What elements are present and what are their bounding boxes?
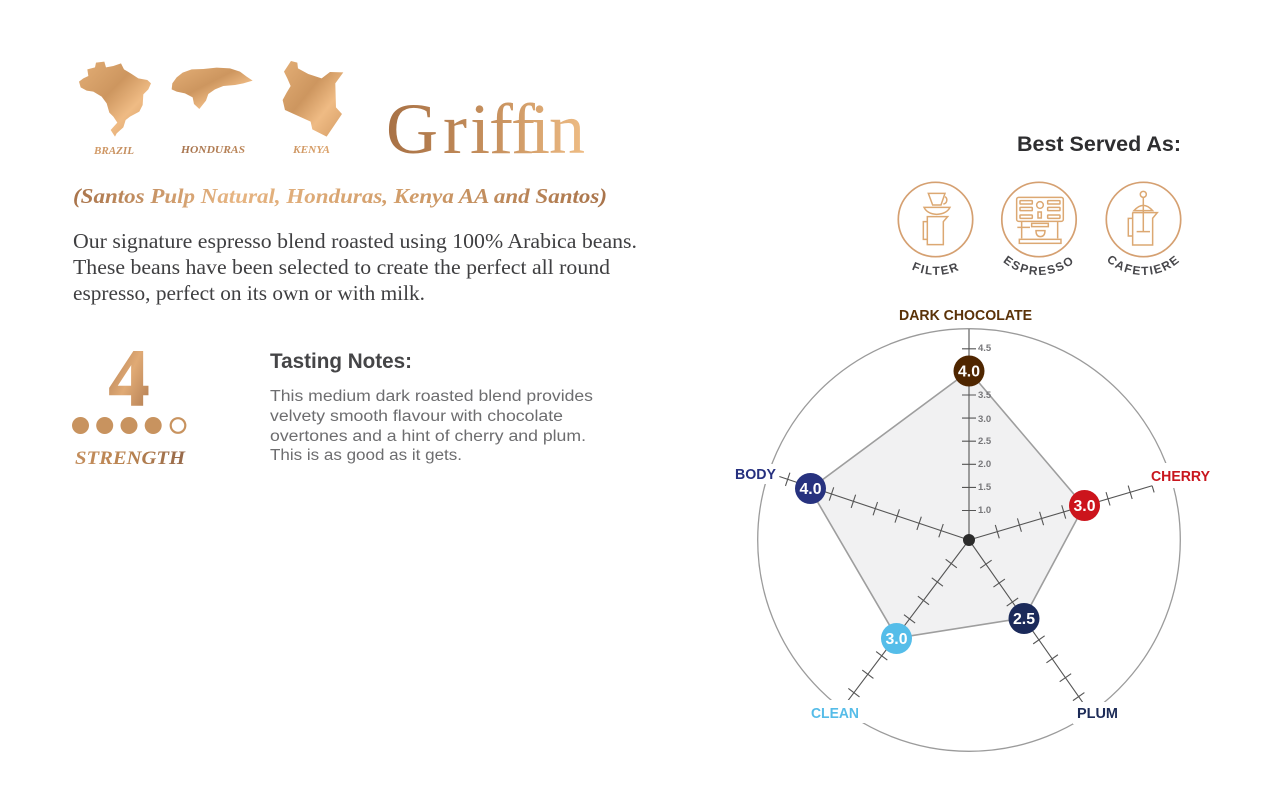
icon: filter bbox=[897, 182, 974, 275]
radar scale labels: 2.0 bbox=[978, 459, 991, 470]
value marker: dark chocolate 4.0 bbox=[954, 356, 984, 386]
strength dots bbox=[72, 417, 185, 434]
radar axes bbox=[777, 329, 1154, 706]
radar scale labels: 2.5 bbox=[978, 436, 992, 447]
title: Griffin bbox=[386, 89, 585, 169]
value marker: plum 2.5: 2.5 bbox=[1013, 611, 1035, 628]
value marker: clean 3.0 bbox=[881, 623, 912, 654]
country maps bbox=[79, 61, 343, 157]
radar center point bbox=[963, 534, 975, 546]
value marker: plum 2.5 bbox=[1008, 603, 1040, 634]
radar outer ring bbox=[758, 329, 1180, 751]
description: espresso, perfect on its own or with milk. bbox=[73, 281, 425, 305]
tasting notes heading: Tasting Notes: bbox=[270, 350, 412, 373]
radar scale labels: 3.0 bbox=[978, 414, 991, 425]
map caption: Brazil: BRAZIL bbox=[93, 146, 134, 157]
tasting notes text: This is as good as it gets. bbox=[270, 447, 462, 464]
map: Honduras bbox=[172, 68, 253, 109]
value marker: body 4.0: 4.0 bbox=[800, 481, 822, 498]
radar scale labels: 1.0 bbox=[978, 505, 991, 516]
radar scale labels: 4.5 bbox=[978, 343, 992, 354]
icon: cafetiere: CAFETIERE bbox=[1108, 256, 1180, 275]
map: Brazil bbox=[79, 62, 151, 137]
icon: espresso: ESPRESSO bbox=[1003, 256, 1072, 276]
subtitle: (Santos Pulp Natural, Honduras, Kenya AA and Santos) bbox=[73, 184, 607, 208]
strength rating bbox=[72, 333, 186, 469]
description: These beans have been selected to create the perfect all round bbox=[73, 255, 610, 279]
label: plum bbox=[1073, 702, 1120, 724]
tasting notes text: velvety smooth flavour with chocolate bbox=[270, 408, 563, 425]
value marker: body 4.0 bbox=[795, 473, 826, 504]
value marker: clean 3.0: 3.0 bbox=[886, 631, 908, 648]
radar chart bbox=[734, 308, 1212, 751]
icon: filter: FILTER bbox=[912, 262, 959, 275]
radar scale labels bbox=[978, 343, 992, 516]
radar scale labels: 3.5 bbox=[978, 390, 992, 401]
map: Kenya bbox=[283, 61, 343, 137]
radar scale labels: 1.5 bbox=[978, 482, 992, 493]
tasting notes text bbox=[270, 388, 593, 464]
label: clean: CLEAN bbox=[811, 706, 859, 722]
best served heading: Best Served As: bbox=[1017, 133, 1181, 156]
map caption: Kenya: KENYA bbox=[292, 145, 330, 156]
map caption: Honduras: HONDURAS bbox=[180, 145, 245, 156]
tasting notes bbox=[270, 350, 593, 464]
description: Our signature espresso blend roasted using 100% Arabica beans. bbox=[73, 229, 637, 253]
label: clean bbox=[810, 700, 865, 723]
tasting notes text: This medium dark roasted blend provides bbox=[270, 388, 593, 405]
label: plum: PLUM bbox=[1077, 706, 1118, 722]
description bbox=[73, 229, 637, 305]
label: body: BODY bbox=[735, 467, 776, 483]
icon: cafetiere bbox=[1105, 182, 1182, 275]
icon: espresso bbox=[1000, 182, 1078, 276]
label: dark chocolate: DARK CHOCOLATE bbox=[899, 308, 1032, 324]
strength label: STRENGTH bbox=[75, 448, 186, 469]
label: cherry bbox=[1151, 463, 1212, 488]
value marker: dark chocolate 4.0: 4.0 bbox=[958, 364, 980, 380]
tasting notes text: overtones and a hint of cherry and plum. bbox=[270, 428, 586, 445]
value marker: cherry 3.0 bbox=[1069, 490, 1100, 521]
strength number: 4 bbox=[109, 333, 149, 423]
label: cherry: CHERRY bbox=[1151, 469, 1210, 485]
radar value polygon bbox=[810, 371, 1084, 638]
value marker: cherry 3.0: 3.0 bbox=[1074, 498, 1096, 515]
